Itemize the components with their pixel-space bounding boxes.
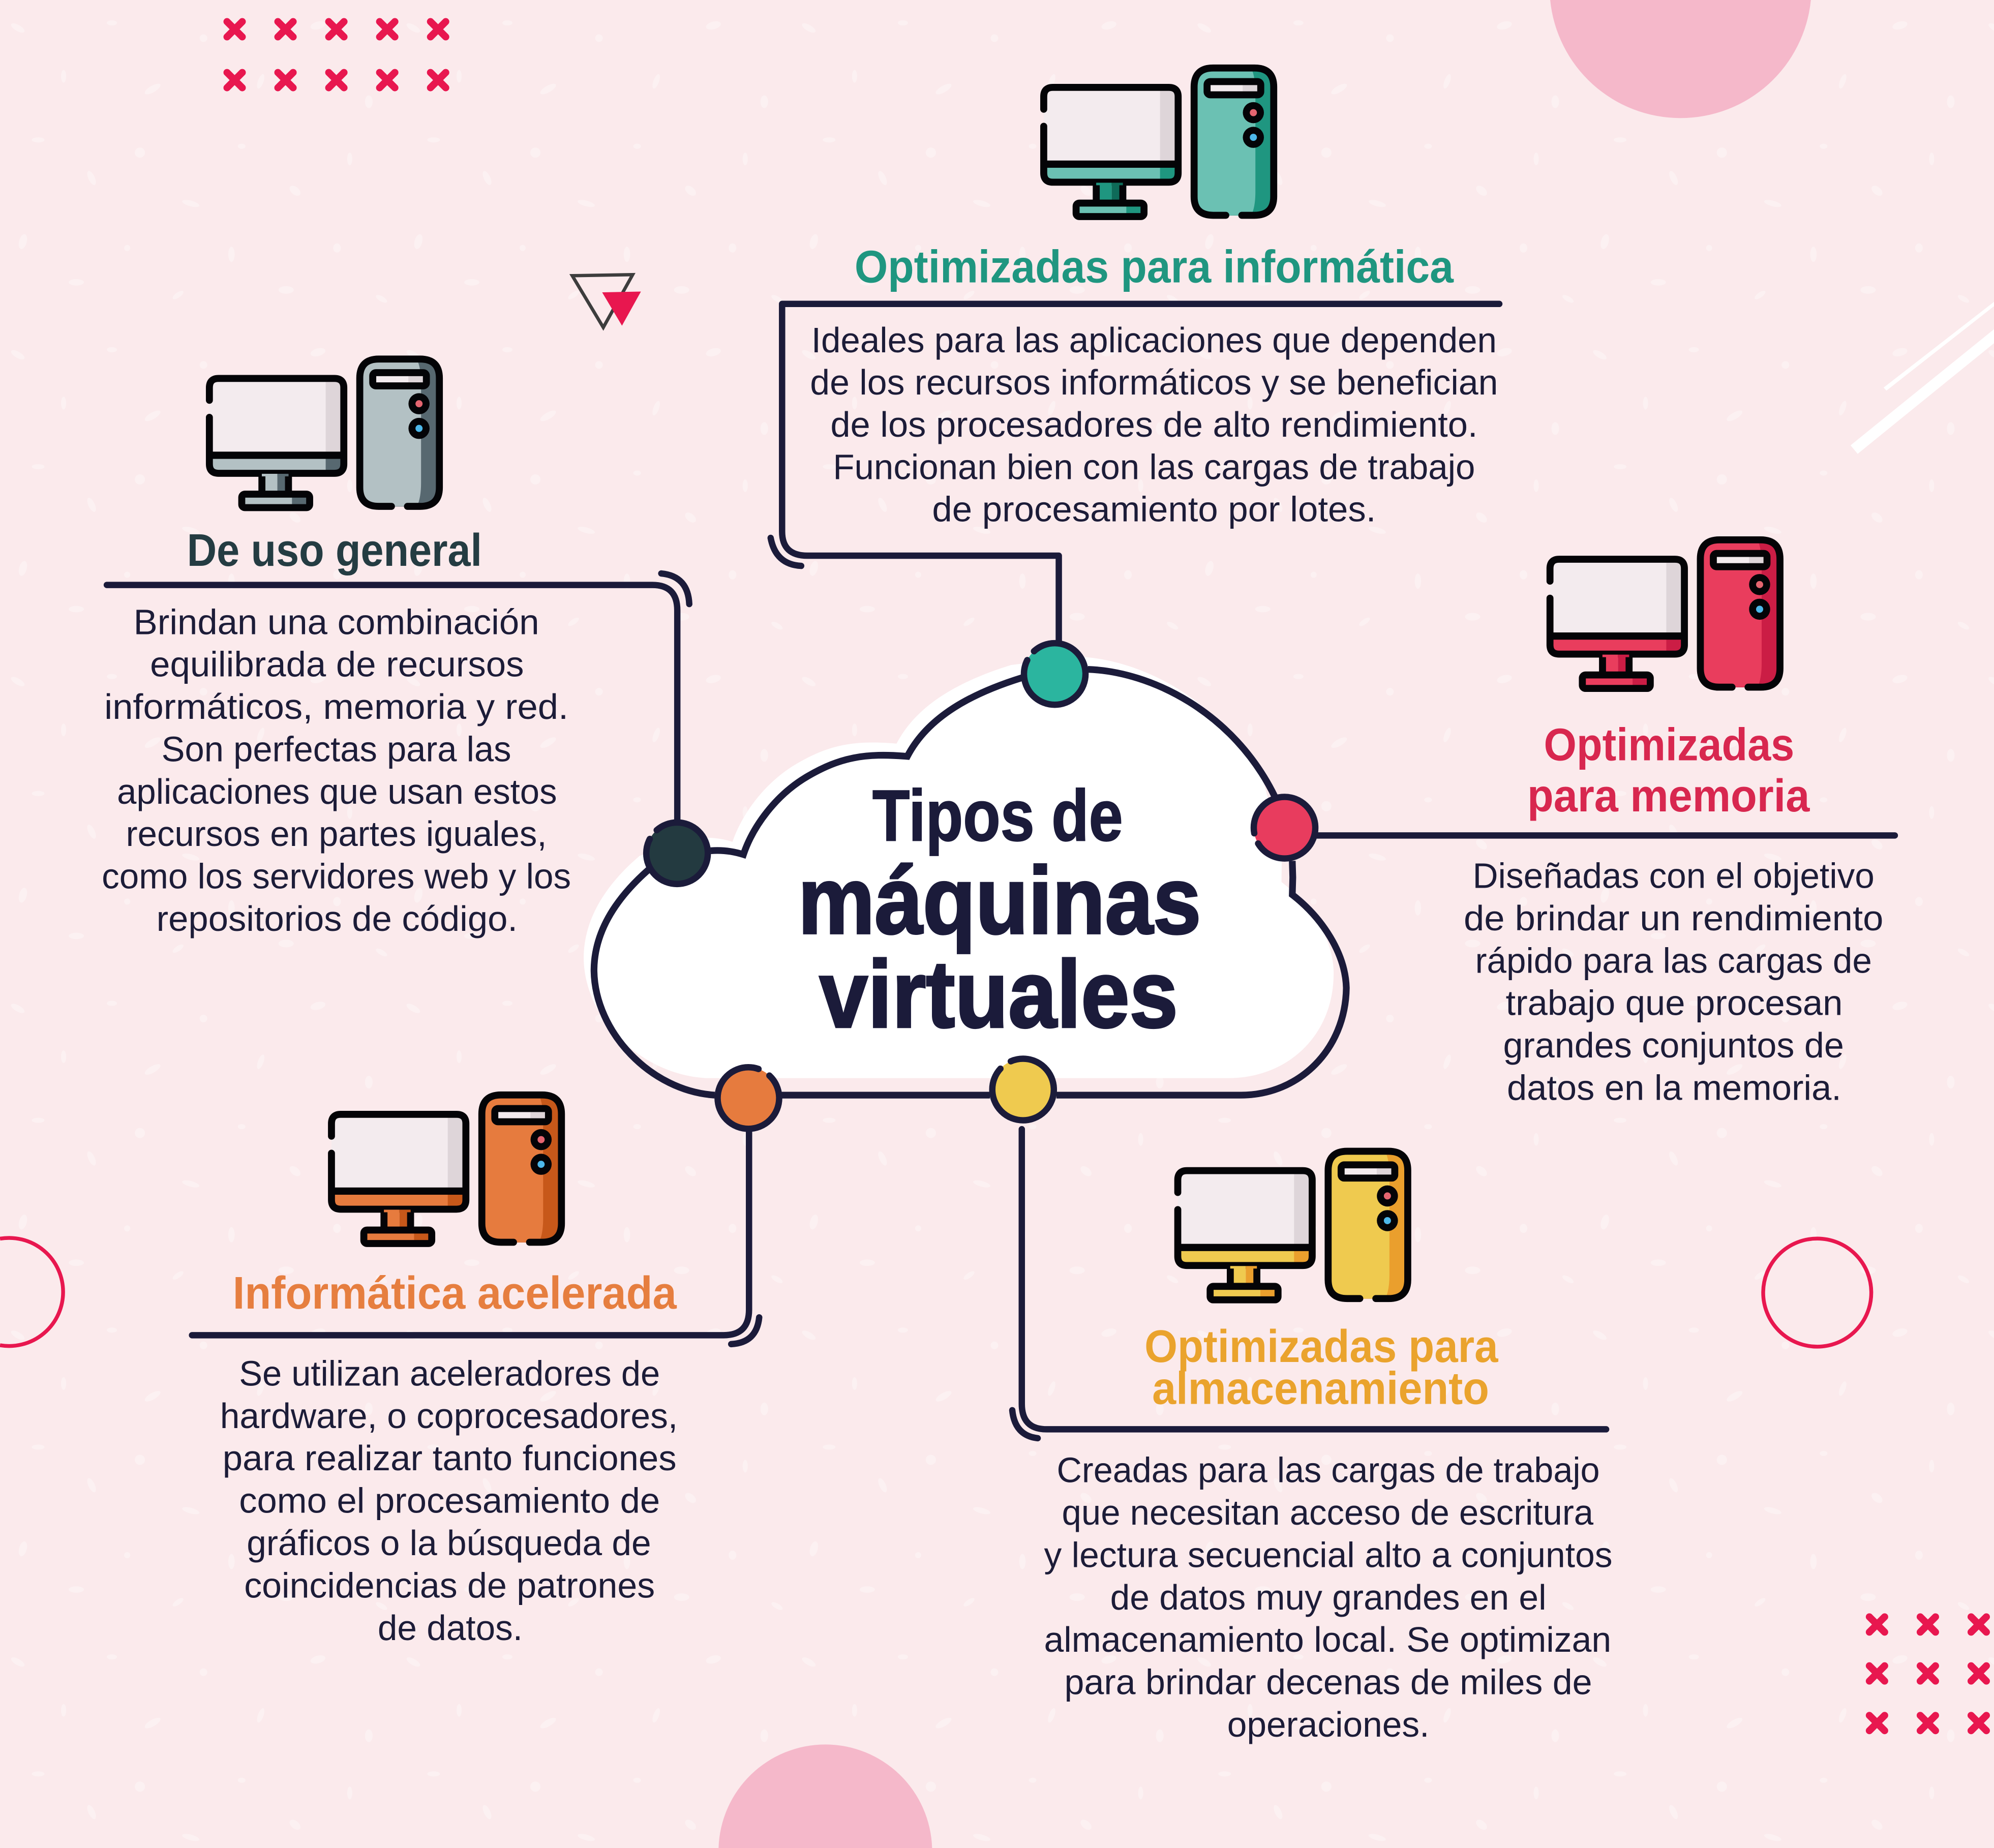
decoration: crosses bottom right (1869, 1617, 1986, 1731)
text block: para realizar tanto funciones (223, 1438, 677, 1478)
connector: acelerada (192, 1132, 759, 1344)
text block: Se utilizan aceleradores de (239, 1354, 660, 1393)
text block (1044, 1450, 1613, 1744)
text block: rápido para las cargas de (1475, 941, 1872, 980)
decoration: crosses top left (227, 22, 446, 88)
text block: hardware, o coprocesadores, (220, 1396, 678, 1436)
heading (1144, 1321, 1498, 1414)
icon: computer yellow (1178, 1152, 1408, 1300)
decoration: pink circle top right (1550, 0, 1811, 118)
text block: Diseñadas con el objetivo (1472, 856, 1875, 896)
cloud node: teal (1024, 643, 1085, 705)
cloud node: orange (717, 1067, 779, 1129)
text block: datos en la memoria. (1507, 1068, 1841, 1108)
title: virtuales (820, 941, 1178, 1047)
connector: uso general (107, 573, 689, 820)
text block: trabajo que procesan (1506, 983, 1842, 1023)
text block: como los servidores web y los (102, 857, 571, 896)
cloud node: dark (646, 823, 708, 884)
heading: Optimizadas (1544, 719, 1794, 771)
icon: computer gray (209, 359, 439, 508)
panel: optimizadas para informática (810, 68, 1498, 529)
text block (220, 1354, 678, 1648)
heading: para memoria (1527, 770, 1810, 822)
text block: para brindar decenas de miles de (1065, 1662, 1592, 1702)
decoration: red ring left (0, 1238, 63, 1346)
connector: almacenamiento (1012, 1129, 1606, 1438)
panel: informática acelerada (220, 1095, 678, 1648)
icon: computer red (1550, 540, 1780, 688)
panel: de uso general (102, 359, 571, 938)
title (798, 775, 1201, 1047)
text block: repositorios de código. (157, 899, 518, 938)
icon: computer orange (331, 1095, 561, 1244)
decoration: white diagonal lines (1851, 302, 1994, 454)
text block (1464, 856, 1883, 1108)
text block: de los recursos informáticos y se benefician (810, 362, 1498, 402)
text block: coincidencias de patrones (244, 1565, 655, 1605)
heading: De uso general (187, 525, 482, 576)
text block (102, 602, 571, 938)
text block (810, 320, 1498, 529)
text block: Creadas para las cargas de trabajo (1057, 1450, 1600, 1490)
text block: de datos. (378, 1608, 523, 1648)
heading: Informática acelerada (233, 1267, 677, 1319)
connector: informática (771, 304, 1499, 642)
heading: almacenamiento (1152, 1362, 1489, 1414)
text block: Son perfectas para las (162, 730, 511, 769)
text block: Brindan una combinación (134, 602, 539, 642)
text block: de brindar un rendimiento (1464, 898, 1883, 938)
heading: Optimizadas para (1144, 1321, 1498, 1372)
heading (1527, 719, 1810, 822)
text block: de datos muy grandes en el (1110, 1578, 1547, 1617)
decoration: triangles (572, 275, 641, 327)
cloud (584, 643, 1346, 1129)
text block: que necesitan acceso de escritura (1062, 1493, 1593, 1532)
decoration: pink circle bottom (718, 1744, 932, 1848)
title: Tipos de (872, 775, 1123, 856)
text block: grandes conjuntos de (1503, 1025, 1844, 1065)
text block: aplicaciones que usan estos (117, 772, 557, 811)
icon: computer green (1044, 68, 1274, 217)
cloud node: yellow (992, 1059, 1054, 1120)
cloud node: red (1254, 797, 1315, 859)
text block: como el procesamiento de (239, 1481, 660, 1521)
title: máquinas (798, 847, 1201, 954)
panel: optimizadas para memoria (1464, 540, 1883, 1108)
panel: optimizadas para almacenamiento (1044, 1152, 1613, 1744)
text block: equilibrada de recursos (150, 645, 524, 684)
text block: gráficos o la búsqueda de (247, 1523, 651, 1563)
text block: almacenamiento local. Se optimizan (1044, 1620, 1611, 1659)
text block: y lectura secuencial alto a conjuntos (1044, 1535, 1613, 1574)
text block: operaciones. (1227, 1705, 1429, 1744)
text block: recursos en partes iguales, (126, 814, 547, 854)
text block: de procesamiento por lotes. (932, 490, 1376, 529)
heading: Optimizadas para informática (855, 241, 1454, 292)
text block: informáticos, memoria y red. (104, 687, 568, 726)
connector: memoria (1316, 834, 1895, 837)
text block: Funcionan bien con las cargas de trabajo (833, 447, 1475, 487)
text block: de los procesadores de alto rendimiento. (830, 405, 1477, 444)
decoration: red ring right (1763, 1238, 1871, 1347)
text block: Ideales para las aplicaciones que dependen (811, 320, 1497, 360)
